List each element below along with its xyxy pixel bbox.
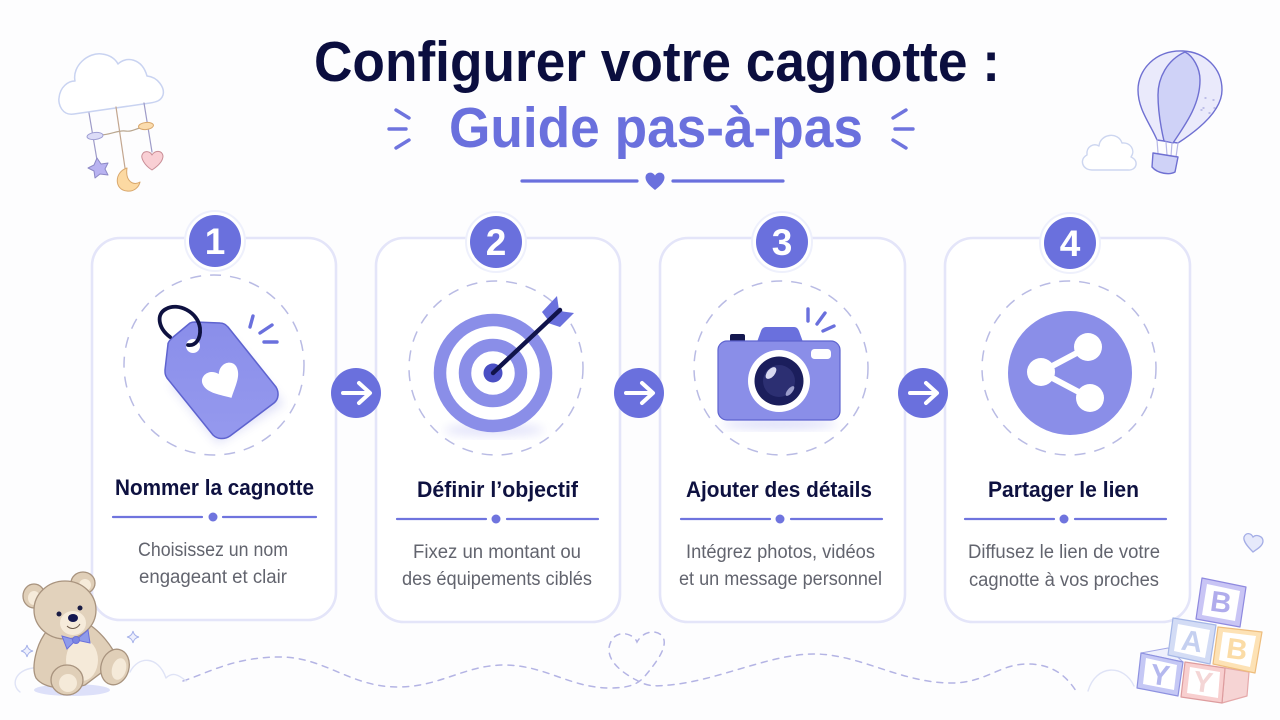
block Y pink: Y — [1191, 666, 1215, 700]
step 4 description: cagnotte à vos proches — [969, 570, 1159, 591]
step 1 heading: Nommer la cagnotte — [115, 475, 314, 500]
number badge 4 — [1040, 213, 1100, 273]
step 3 description: Intégrez photos, vidéos — [686, 542, 875, 563]
dashed circle 3 — [694, 281, 868, 455]
dashed circle 4 — [982, 281, 1156, 455]
step 3 description — [679, 542, 882, 590]
number badge 2 — [466, 212, 526, 272]
title divider with heart — [522, 173, 783, 190]
step 1 description: engageant et clair — [139, 567, 288, 588]
step 4 description: Diffusez le lien de votre — [968, 542, 1160, 563]
arrow 1 to 2 — [331, 368, 381, 418]
step 4 divider — [965, 514, 1166, 524]
panel: step 4 — [945, 213, 1190, 622]
title — [314, 30, 1000, 160]
baby blocks — [1137, 578, 1262, 703]
block Y blue: Y — [1148, 659, 1172, 693]
small heart right — [1244, 534, 1263, 552]
step 4 description — [968, 542, 1160, 591]
card 3 background — [660, 238, 905, 622]
icon: price tag with heart — [160, 307, 284, 444]
step 1 description — [138, 540, 288, 588]
number badge 3 — [752, 212, 812, 272]
number badge 2: 2 — [486, 222, 506, 263]
block B orange: B — [1224, 633, 1249, 667]
subtitle sparks — [389, 110, 913, 148]
step 2 description — [402, 542, 592, 590]
icon: camera — [718, 309, 840, 429]
icon: share — [1008, 311, 1132, 435]
teddy bear — [23, 572, 133, 696]
number badge 4: 4 — [1060, 223, 1081, 264]
step 1 divider — [113, 512, 316, 522]
step 2 description: Fixez un montant ou — [413, 542, 581, 563]
block B purple: B — [1208, 586, 1233, 620]
number badge 1: 1 — [205, 221, 225, 262]
title: Configurer votre cagnotte : — [314, 30, 1000, 94]
bottom clouds — [15, 660, 1134, 692]
dashed circle 2 — [409, 281, 583, 455]
step 3 divider — [681, 514, 882, 524]
number badge 1 — [185, 211, 245, 271]
arrow 2 to 3 — [614, 368, 664, 418]
card 1 background — [92, 238, 336, 620]
sparkles near teddy — [21, 631, 139, 657]
card 4 background — [945, 238, 1190, 622]
icon: target with arrow — [440, 296, 574, 436]
panel: step 1 — [92, 211, 336, 620]
step 3 heading: Ajouter des détails — [686, 477, 872, 502]
step 1 description: Choisissez un nom — [138, 540, 288, 561]
mobile decoration — [59, 54, 163, 191]
dashed wave with heart — [183, 632, 1078, 694]
card 2 background — [376, 238, 620, 622]
number badge 3: 3 — [772, 222, 792, 263]
small cloud top right — [1082, 135, 1136, 170]
arrow 3 to 4 — [898, 368, 948, 418]
step 2 heading: Définir l’objectif — [417, 477, 579, 502]
step 3 description: et un message personnel — [679, 569, 882, 590]
panel: step 3 — [660, 212, 905, 622]
subtitle: Guide pas-à-pas — [449, 96, 863, 160]
step 4 heading: Partager le lien — [988, 477, 1139, 502]
hot air balloon — [1138, 51, 1222, 174]
step 2 description: des équipements ciblés — [402, 569, 592, 590]
step 2 divider — [397, 514, 598, 524]
panel: step 2 — [376, 212, 620, 622]
block A: A — [1179, 625, 1205, 659]
dashed circle 1 — [124, 275, 304, 455]
